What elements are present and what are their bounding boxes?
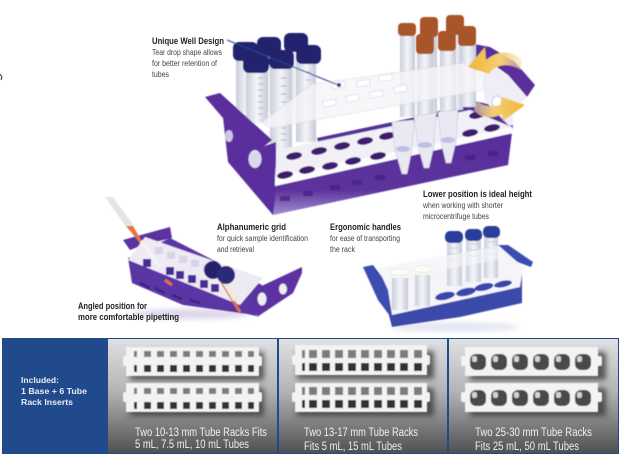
image: main purple rack with tubes: [205, 15, 535, 215]
callout: ergonomic handles: for ease of transporting: [330, 234, 400, 243]
ports on handle: [258, 292, 266, 306]
callout: unique well design: tubes: [152, 70, 169, 79]
blue caps: [233, 33, 321, 73]
white tilted insert: [128, 237, 263, 305]
rack pair: [461, 347, 602, 412]
yellow rotation arrow top: [468, 47, 522, 74]
tear-drop highlights: [472, 356, 582, 398]
callout: angled position: [78, 301, 179, 322]
pipette: [105, 197, 134, 228]
callout: unique well design: Tear drop shape allows: [152, 48, 222, 57]
image: blue rack lower position: [363, 226, 533, 331]
right handle: [253, 267, 302, 317]
callout: lower position: Lower position is ideal height: [423, 189, 532, 199]
pipette orange tip: [126, 226, 143, 243]
lower white tray: [275, 110, 513, 186]
callout: ergonomic handles: Ergonomic handles: [330, 222, 401, 232]
left handle: [123, 227, 172, 250]
rack base front band: [272, 125, 513, 215]
caption: [135, 427, 267, 451]
blue caps: [204, 261, 222, 279]
purple left handle: [205, 93, 272, 148]
included text: Included:: [21, 375, 59, 385]
callout: alphanumeric grid: and retrieval: [217, 245, 254, 254]
caption: Two 25-30 mm Tube Racks: [475, 427, 592, 439]
orange capped tubes: [398, 15, 476, 120]
callout: lower position: microcentrifuge tubes: [423, 212, 489, 221]
callout: unique well design: [152, 36, 224, 79]
upper white insert rack: [262, 63, 484, 128]
callout: unique well design: Unique Well Design: [152, 36, 224, 46]
orange tube hints: [165, 280, 240, 312]
rack shadows: [470, 352, 606, 416]
leader dot: [337, 83, 341, 87]
panel: 13-17 mm racks: [279, 339, 447, 453]
rack pair: [292, 345, 430, 412]
blue body: [385, 255, 522, 327]
panel: 10-13 mm racks: [108, 339, 277, 453]
callout: alphanumeric grid: Alphanumeric grid: [217, 222, 286, 232]
callout: ergonomic handles: the rack: [330, 245, 356, 254]
insert back holes: [155, 247, 223, 275]
caption: 5 mL, 7.5 mL, 10 mL Tubes: [135, 439, 249, 451]
panel: included strip: [2, 338, 619, 454]
caption: Fits 25 mL, 50 mL Tubes: [475, 441, 579, 453]
rack pair: [123, 347, 262, 412]
upper rack holes: [323, 74, 407, 107]
image: angled rack with pipette: [105, 197, 302, 319]
floor shadow: [130, 309, 250, 319]
included text: [21, 375, 87, 407]
rack shadows: [297, 351, 434, 416]
stray mark at left edge: [0, 74, 2, 80]
orange caps: [398, 15, 476, 54]
callout: angled position: more comfortable pipetting: [78, 312, 179, 322]
tube liquid: [396, 137, 455, 152]
upper insert band over tubes: [378, 246, 507, 280]
caption: Two 10-13 mm Tube Racks Fits: [135, 427, 267, 439]
included text: Rack Inserts: [21, 397, 73, 407]
back wall of base: [317, 100, 513, 165]
microcentrifuge tubes: [392, 110, 458, 174]
pipette clear tip: [141, 241, 160, 267]
foot holes: [140, 283, 200, 303]
leader line: [227, 40, 338, 85]
white capped tubes: [390, 266, 432, 310]
base foot holes: [280, 151, 498, 201]
panel: 25-30 mm racks: [449, 339, 618, 453]
caption: Fits 5 mL, 15 mL Tubes: [304, 441, 402, 453]
blue tubes: [445, 226, 500, 286]
callout: alphanumeric grid: [217, 222, 308, 254]
right end panel: [484, 60, 527, 130]
strip frame: [2, 338, 619, 454]
caption: [475, 427, 592, 453]
callout: angled position: Angled position for: [78, 301, 147, 311]
callout: ergonomic handles: [330, 222, 401, 254]
purple base: [128, 238, 262, 316]
lower tray holes: [276, 110, 501, 180]
callout: lower position: [422, 189, 532, 221]
purple right handle: [474, 44, 535, 97]
callout: unique well design: for better retention of: [152, 59, 218, 68]
insert front holes: [143, 259, 219, 292]
left end panel: [223, 117, 276, 215]
blue left handle: [363, 265, 392, 316]
rack shadows: [130, 352, 264, 416]
left ports: [248, 150, 262, 168]
shadow: [390, 323, 520, 331]
caption: Two 13-17 mm Tube Racks: [304, 427, 418, 439]
callout: alphanumeric grid: for quick sample identification: [217, 234, 308, 243]
white rack insert: [378, 245, 523, 315]
caption: [304, 427, 418, 453]
yellow rotation arrow bottom: [474, 97, 525, 121]
port on right panel: [492, 96, 502, 108]
included text: 1 Base + 6 Tube: [21, 386, 87, 396]
graduations: [258, 72, 311, 140]
blue capped tubes: [233, 33, 321, 150]
blue right handle: [498, 245, 533, 267]
tube holes: [434, 279, 512, 302]
callout: lower position: when working with shorter: [422, 201, 503, 210]
